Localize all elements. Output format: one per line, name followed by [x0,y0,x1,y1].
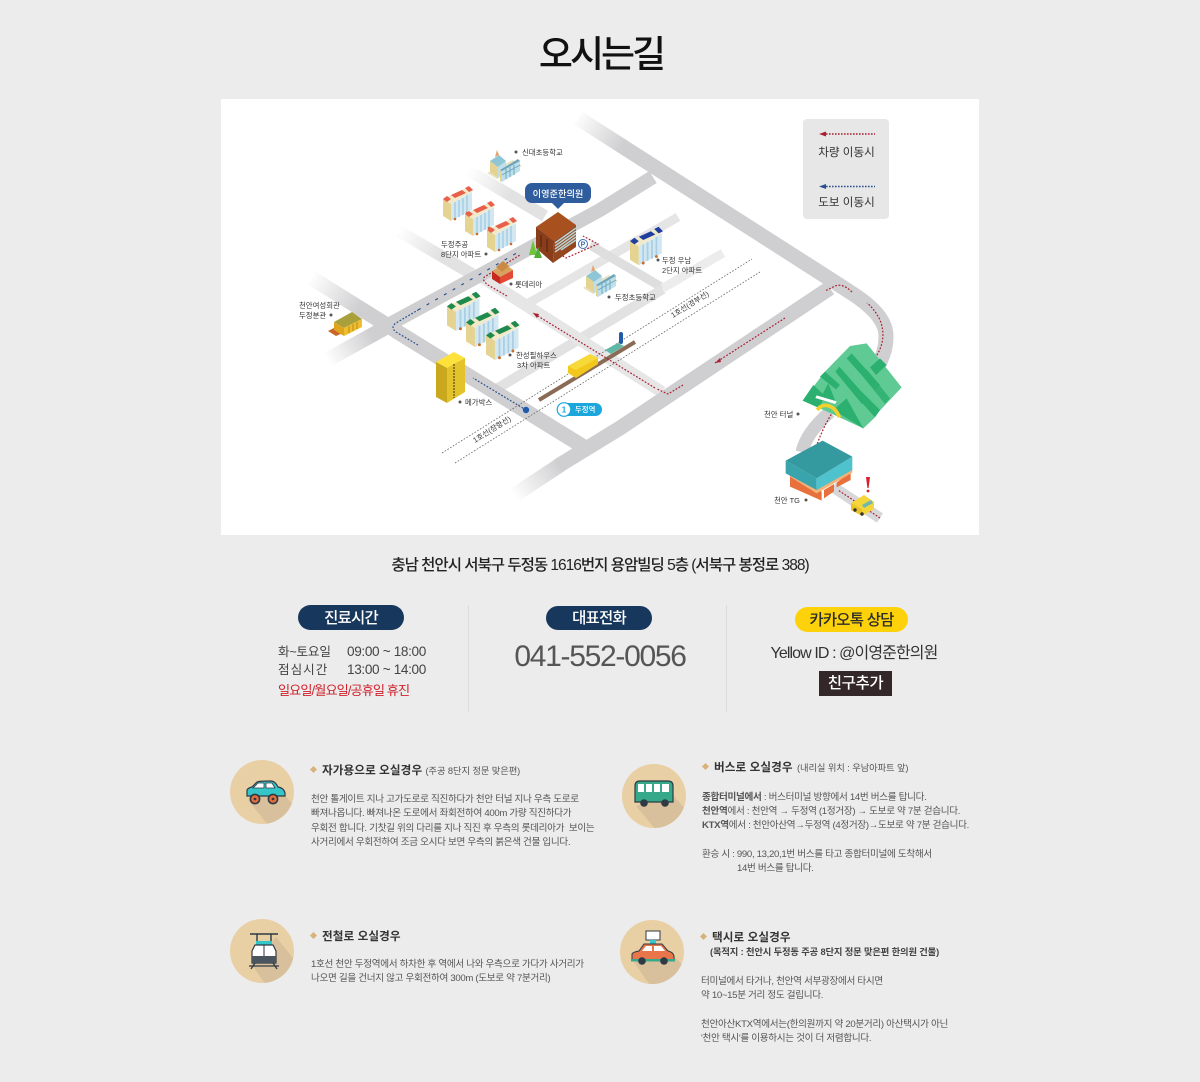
map labels: 3차 아파트 [517,361,551,370]
subway heading: 전철로 오실경우 [322,930,401,943]
map labels: 천안 TG [774,496,800,505]
address: 충남 천안시 서북구 두정동 1616번지 용암빌딩 5층 (서북구 봉정로 388) [391,557,809,574]
legend [803,119,889,219]
school: Dujeong [583,265,618,297]
map labels: 두정 우남 [662,256,691,265]
panel: illustrated map [221,99,979,535]
subway body text [311,958,584,984]
bus heading: 버스로 오실경우 (내리실 위치 : 우남아파트 앞) [714,761,908,774]
toll gate [786,441,852,501]
walking route [393,250,526,410]
vehicle route [484,236,883,518]
taxi body text: 천안아산KTX역에서는(한의원까지 약 20분거리) 아산택시가 아닌 [701,1019,948,1030]
map labels: 1호선(장항선) [471,414,513,445]
subway body text: 나오면 길을 건너지 않고 우회전하여 300m (도보로 약 7분거리) [311,973,550,984]
phone number: 041-552-0056 [514,640,686,673]
map labels: 두정초등학교 [615,293,656,302]
station label: 1 [562,406,567,414]
map labels [299,148,808,505]
taxi body text: 약 10~15분 거리 정도 걸립니다. [701,990,823,1001]
school: Sindae [487,150,522,182]
taxi body text: '천안 택시'를 이용하시는 것이 더 저렴합니다. [701,1033,871,1044]
icon: bus [622,764,686,828]
bus body text: 천안역에서 : 천안역 → 두정역 (1정거장) → 도보로 약 7분 걷습니다. [702,806,960,817]
car with warning [851,477,874,516]
map labels: 1호선(경부선) [669,289,711,320]
taxi body text: 터미널에서 타거나, 천안역 서부광장에서 타시면 [701,976,883,987]
Megabox tower [436,352,465,403]
women's center [328,312,362,336]
title: 오시는길 [539,34,663,75]
map labels: 한성필하우스 [516,351,557,360]
taxi body text [701,976,948,1044]
roads [310,118,886,518]
panel: kakao talk [770,607,937,696]
divider right [726,605,727,712]
station label: 두정역 [575,405,595,414]
legend: 차량 이동시 [818,146,875,159]
taxi destination: (목적지 : 천안시 두정동 주공 8단지 정문 맞은편 한의원 건물) [710,947,939,957]
car body text: 빠져나옵니다. 빠져나온 도로에서 좌회전하여 400m 가량 직진하다가 [311,808,571,819]
hospital building [529,212,576,263]
add friend button: 친구추가 [828,675,883,692]
bus body text: 환승 시 : 990, 13,20,1번 버스를 타고 종합터미널에 도착해서 [702,849,932,860]
subway body text: 1호선 천안 두정역에서 하차한 후 역에서 나와 우측으로 가다가 사거리가 [311,959,584,970]
blue apartments [630,227,663,265]
hours badge: 진료시간 [324,610,378,627]
railway platform and trains [539,332,635,400]
weekday hours: 화~토요일 [278,645,331,659]
bus body text: 종합터미널에서 : 버스터미널 방향에서 14번 버스를 탑니다. [702,792,926,803]
lunch hours: 점심시간 [278,663,328,677]
add friend button [819,671,892,696]
map labels: 천안여성회관 [299,301,340,310]
bus body text [702,792,969,874]
hospital callout: 이영준한의원 [533,188,583,199]
station label [557,403,602,416]
map labels: 롯데리아 [515,280,542,289]
parking sign: P [581,242,586,249]
kakao badge: 카카오톡 상담 [809,612,894,629]
map labels: 두정분관 [299,311,326,320]
map labels: 천안 터널 [764,410,793,419]
panel: clinic hours: 13:00 ~ 14:00 [347,662,426,677]
legend: 도보 이동시 [818,196,875,209]
taxi heading: 택시로 오실경우 [712,931,791,944]
car body text: 천안 톨게이트 지나 고가도로로 직진하다가 천안 터널 지나 우측 도로로 [311,794,579,805]
taxi directions [700,931,948,1044]
panel: clinic hours [278,605,426,698]
hospital callout [525,183,591,209]
map labels: 신대초등학교 [522,148,563,157]
bus body text: 14번 버스를 탑니다. [737,863,814,874]
divider left [468,605,469,712]
icon: train [230,919,294,983]
car body text [311,794,594,848]
car directions [310,764,594,848]
station marker dot [523,407,529,413]
map labels: 2단지 아파트 [662,266,702,275]
hours badge [298,605,404,630]
icon: taxi [620,920,684,984]
kakao badge [795,607,908,632]
car body text: 우회전 합니다. 기찻길 위의 다리를 지나 직진 후 우측의 롯데리아가 보이는 [311,823,594,834]
red apartments [443,186,517,252]
phone badge [546,606,652,630]
phone badge: 대표전화 [572,610,626,627]
bus directions [702,761,969,874]
bus body text: KTX역에서 : 천안아산역→두정역 (4정거장)→도보로 약 7분 걷습니다. [702,820,969,831]
panel: phone [514,606,686,673]
map labels: 8단지 아파트 [441,250,481,259]
car body text: 사거리에서 우회전하여 조금 오시다 보면 우측의 붉은색 건물 입니다. [311,837,570,848]
Lotteria [492,261,513,284]
panel: clinic hours: 09:00 ~ 18:00 [347,644,426,659]
map labels: 두정주공 [441,240,468,249]
green apartments [447,292,520,360]
closed days: 일요일/월요일/공휴일 휴진 [278,683,409,698]
kakao id: Yellow ID : @이영준한의원 [771,645,937,662]
icon: car [230,760,294,824]
mountain tunnel [803,343,902,428]
rail lines [442,259,760,463]
map labels: 메가박스 [465,398,492,407]
car heading: 자가용으로 오실경우 (주공 8단지 정문 맞은편) [322,764,520,777]
parking sign [578,240,588,249]
subway directions [310,930,584,984]
